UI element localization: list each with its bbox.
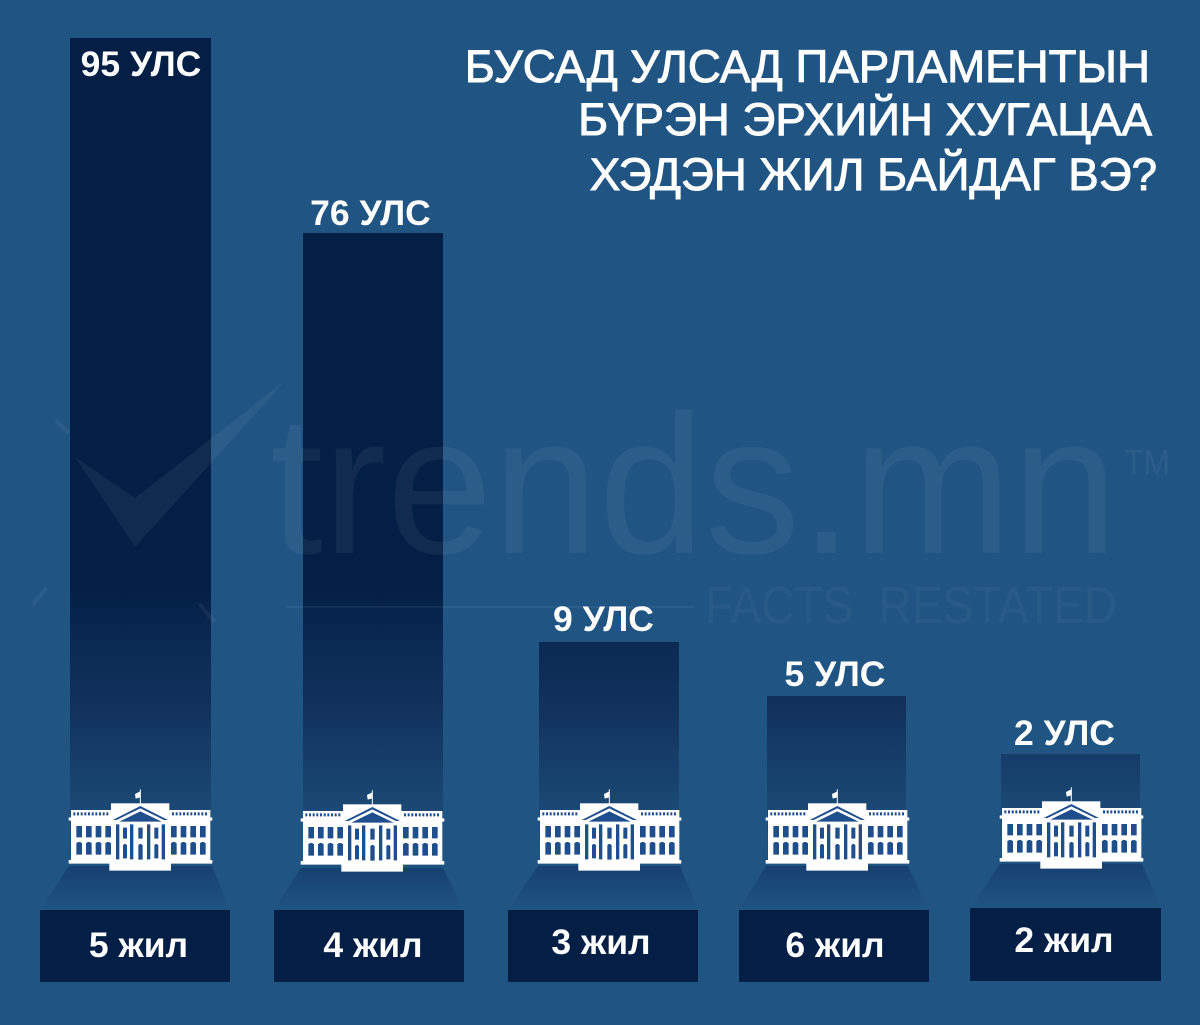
icon: parliament building [538, 789, 681, 871]
column base: 3 жил: 3 жил [551, 922, 651, 962]
column label: 76 УЛС: 76 УЛС [310, 193, 431, 233]
column base: 4 жил: 4 жил [323, 925, 423, 965]
title: БҮРЭН ЭРХИЙН ХУГАЦАА [578, 93, 1153, 145]
column base: 5 жил: 5 жил [89, 925, 188, 965]
column label: 5 УЛС: 5 УЛС [785, 654, 885, 694]
icon: parliament building [766, 789, 909, 871]
column base: 4 жил [274, 790, 464, 982]
column base: 2 жил: 2 жил [1014, 920, 1114, 960]
title [465, 41, 1157, 200]
bar: 9 countries [539, 642, 679, 870]
column label: 2 УЛС: 2 УЛС [1014, 713, 1115, 753]
watermark: trends.mn logo: FACTS RESTATED [705, 577, 1117, 635]
icon: parliament building [301, 790, 444, 872]
bar: 95 countries [70, 38, 211, 870]
column base: 6 жил: 6 жил [785, 925, 885, 965]
icon: parliament building [69, 789, 212, 871]
column base: 6 жил [739, 789, 929, 982]
column base: 3 жил [508, 789, 698, 982]
bar: 2 countries [1001, 754, 1140, 868]
column base: 5 жил [40, 789, 230, 982]
bar: 76 countries [303, 233, 443, 870]
title: ХЭДЭН ЖИЛ БАЙДАГ ВЭ? [590, 148, 1157, 200]
watermark: trends.mn logo: trends.mn [270, 374, 1118, 595]
column label: 95 УЛС: 95 УЛС [81, 44, 201, 84]
watermark: trends.mn logo: TM [1124, 442, 1170, 483]
column base: 2 жил [970, 787, 1161, 981]
watermark: trends.mn logo [31, 374, 1170, 635]
title: БУСАД УЛСАД ПАРЛАМЕНТЫН [465, 41, 1150, 92]
column label: 9 УЛС: 9 УЛС [553, 599, 654, 639]
bar: 5 countries [767, 696, 906, 870]
icon: parliament building [1000, 787, 1143, 869]
